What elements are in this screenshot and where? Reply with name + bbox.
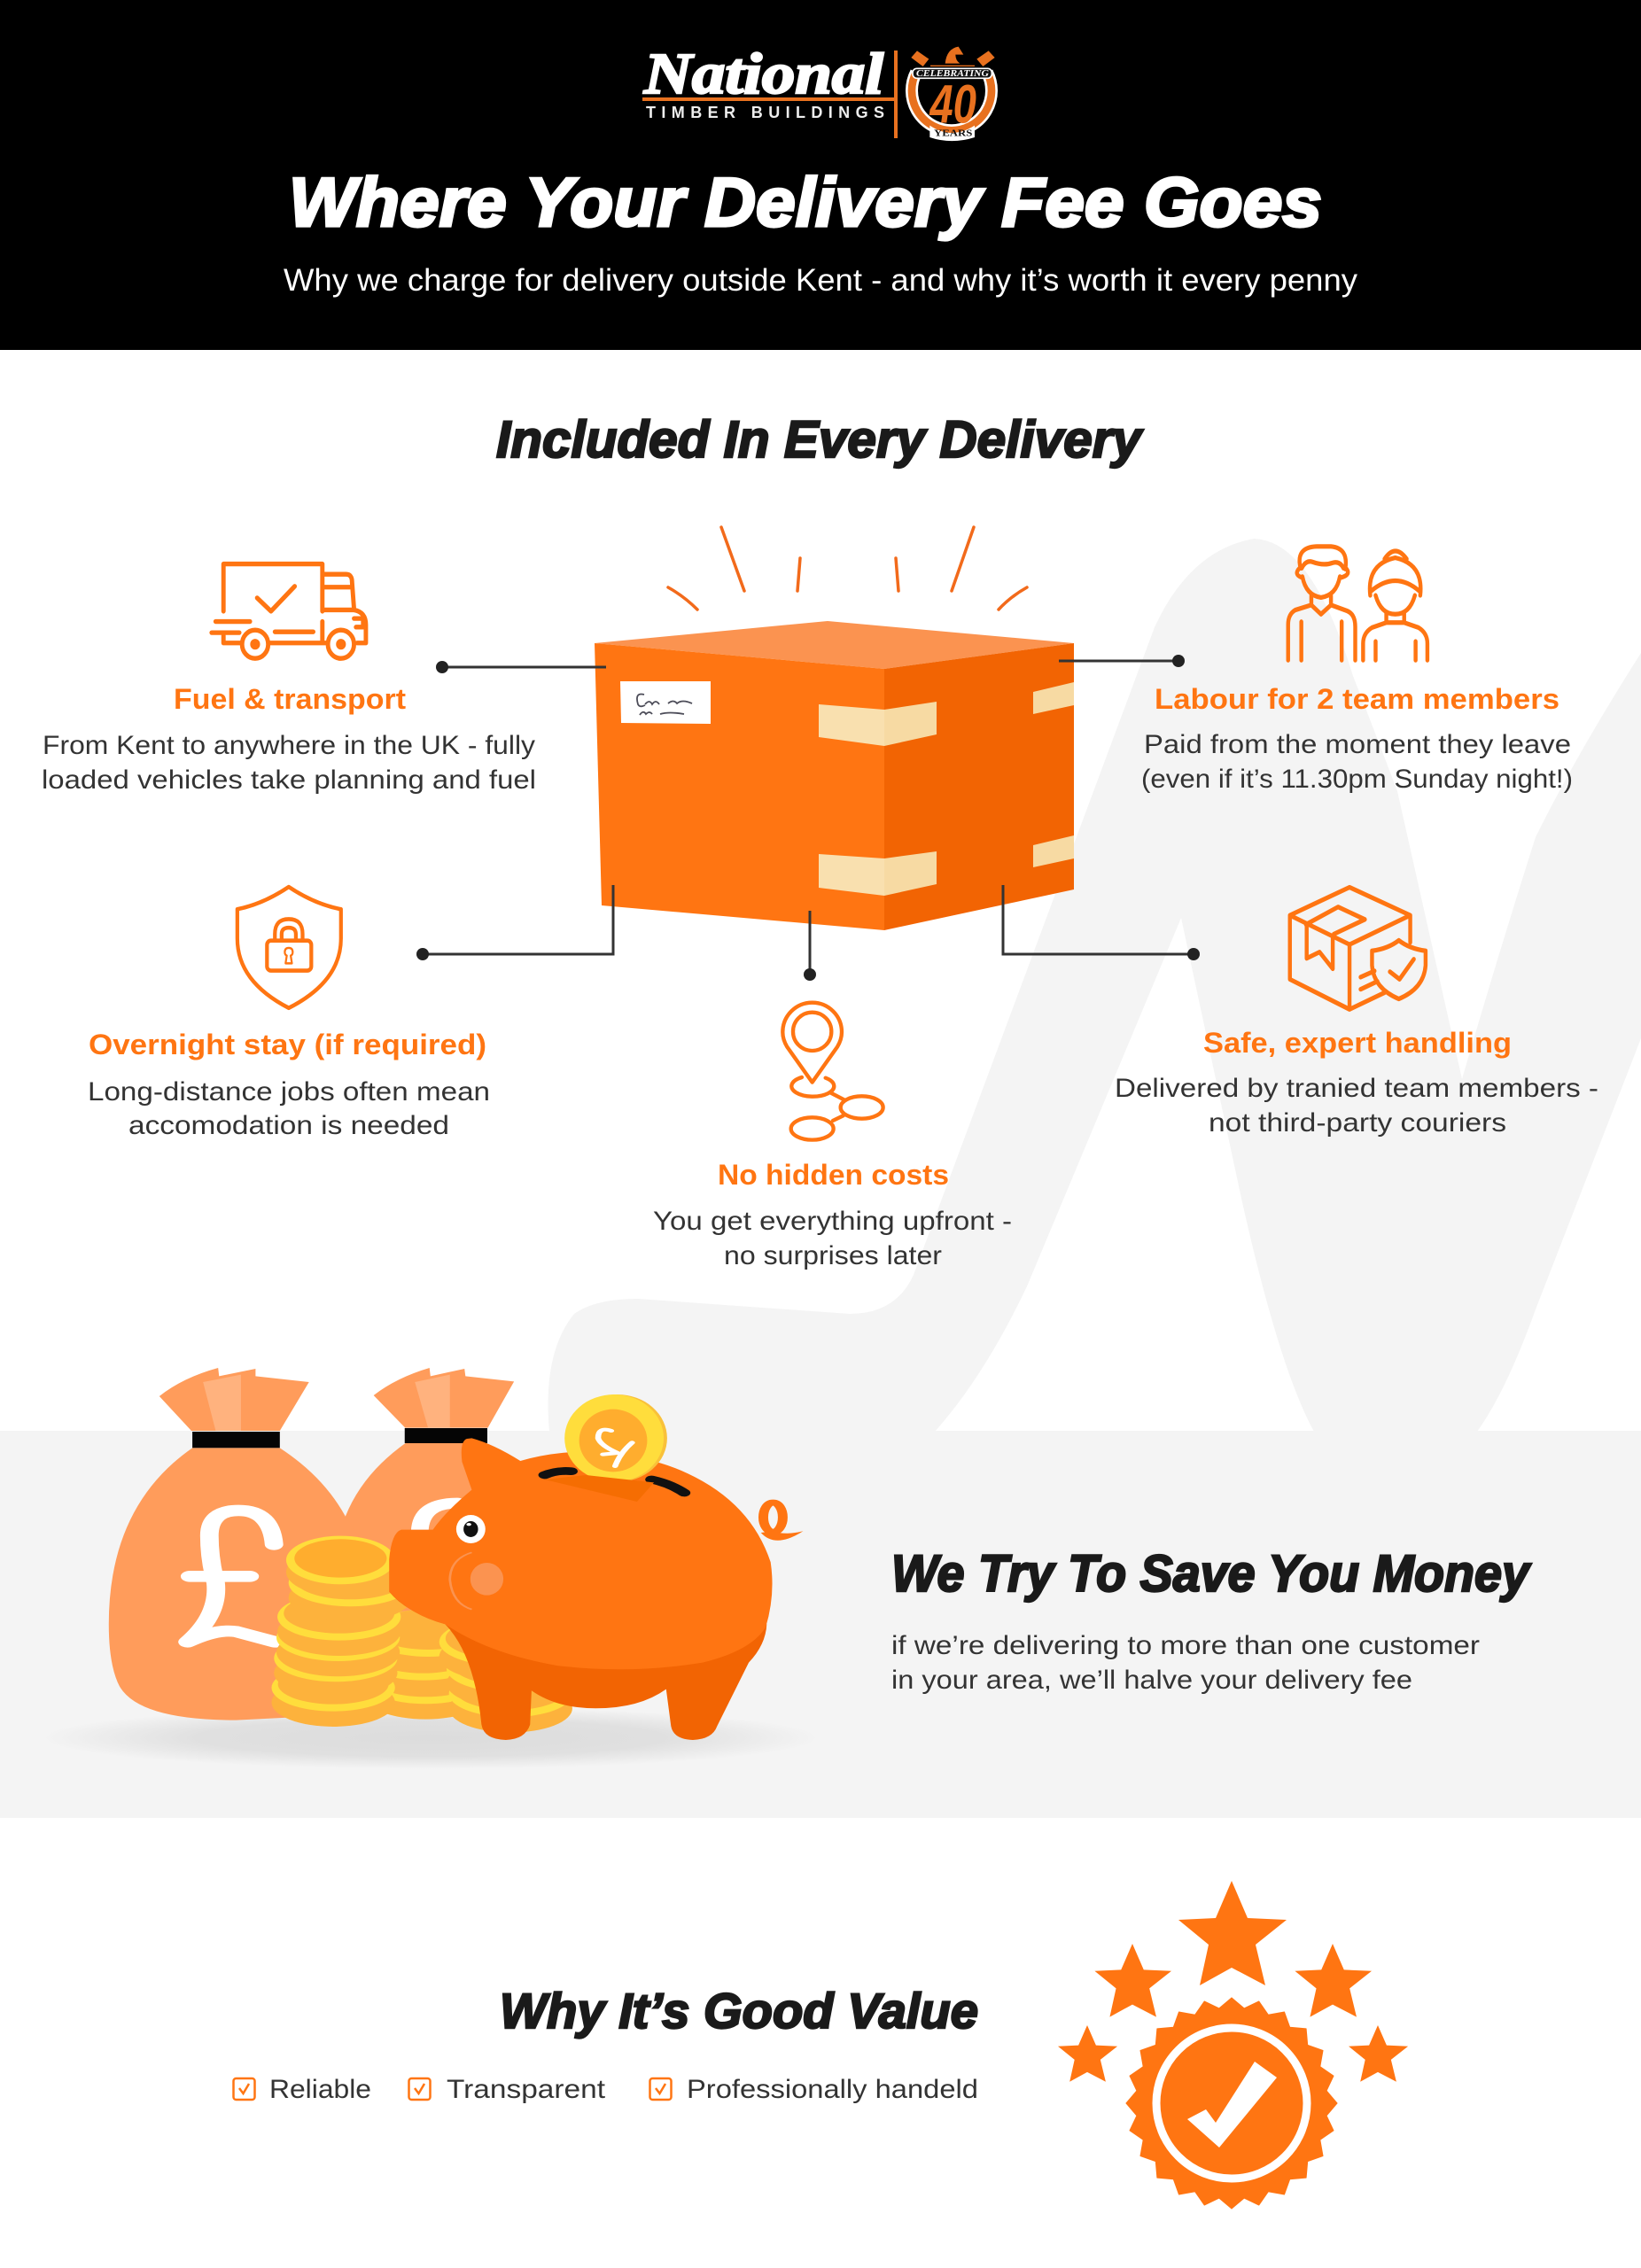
logo: National Timber Buildings: National	[643, 42, 884, 106]
heading: we try to save you money: We Try To Save You Money	[891, 1545, 1532, 1603]
packing tape	[819, 682, 1074, 896]
burst rays	[668, 527, 1027, 610]
subtitle: Why we charge for delivery outside Kent - and why it’s worth it every penny	[284, 263, 1358, 298]
rosette	[1126, 1998, 1337, 2209]
icon: location pin with route	[782, 1003, 883, 1140]
label: Overnight stay (if required)	[89, 1029, 486, 1060]
item: overnight stay	[88, 887, 490, 1140]
description: Delivered by tranied team members -	[1115, 1074, 1598, 1103]
piggy bank	[389, 1394, 803, 1740]
background: large grey N watermark	[548, 539, 1641, 1432]
description	[88, 1077, 490, 1140]
heading: included in every delivery: Included In Every Delivery	[496, 411, 1144, 469]
description: accomodation is needed	[128, 1111, 449, 1140]
logo badge: celebrating 40 years: 40	[929, 74, 976, 135]
money bag front	[109, 1368, 382, 1720]
address label	[620, 681, 711, 724]
money bag back	[314, 1368, 514, 1707]
icon: delivery truck	[212, 564, 366, 658]
check item: reliable	[234, 2075, 371, 2104]
check item: professionally handled: Professionally handeld	[687, 2075, 978, 2104]
label: Labour for 2 team members	[1155, 683, 1559, 715]
item: fuel and transport	[42, 564, 536, 795]
item: safe expert handling	[1115, 887, 1598, 1138]
icon: rosette with check and five stars	[1058, 1881, 1408, 2209]
icon: two team members	[1288, 547, 1427, 660]
check item: transparent: Transparent	[447, 2075, 606, 2104]
label: No hidden costs	[718, 1159, 949, 1191]
description: not third-party couriers	[1209, 1108, 1506, 1138]
savings description	[891, 1631, 1480, 1695]
check item: reliable: Reliable	[269, 2075, 371, 2104]
logo: National Timber Buildings	[642, 42, 898, 138]
logo badge: celebrating 40 years: CELEBRATING	[916, 69, 990, 79]
description: You get everything upfront -	[653, 1207, 1012, 1236]
logo badge: celebrating 40 years	[911, 47, 995, 141]
description	[42, 731, 536, 795]
central parcel illustration	[595, 527, 1074, 930]
connector lines with dots	[416, 655, 1200, 981]
item: no hidden costs	[653, 1003, 1012, 1270]
illustration: money bags, coins and piggy bank	[42, 1368, 820, 1769]
coin stacks	[271, 1536, 572, 1733]
checklist	[234, 2075, 978, 2104]
title: Where Your Delivery Fee Goes	[289, 163, 1322, 241]
logo badge: celebrating 40 years: YEARS	[934, 128, 972, 138]
description: loaded vehicles take planning and fuel	[42, 765, 536, 795]
header band	[0, 0, 1641, 350]
label: Fuel & transport	[174, 683, 406, 715]
icon: shield with padlock	[237, 887, 341, 1008]
description: (even if it’s 11.30pm Sunday night!)	[1141, 765, 1573, 794]
description	[653, 1207, 1012, 1270]
panel: savings band	[0, 1368, 1641, 1818]
item: labour for 2 team members	[1141, 547, 1573, 794]
description: Long-distance jobs often mean	[88, 1077, 490, 1107]
savings description: in your area, we’ll halve your delivery fee	[891, 1666, 1412, 1695]
savings description: if we’re delivering to more than one customer	[891, 1631, 1480, 1660]
description	[1141, 730, 1573, 794]
description: Paid from the moment they leave	[1144, 730, 1571, 759]
description: From Kent to anywhere in the UK - fully	[43, 731, 535, 760]
icon: parcel with shield	[1290, 887, 1426, 1009]
description	[1115, 1074, 1598, 1138]
description: no surprises later	[724, 1241, 942, 1270]
ground shadow	[42, 1707, 820, 1769]
logo: National Timber Buildings: TIMBER BUILDINGS	[646, 104, 884, 121]
heading: why it's good value: Why It’s Good Value	[500, 1983, 978, 2039]
stars	[1058, 1881, 1408, 2082]
box faces	[595, 621, 1074, 930]
label: Safe, expert handling	[1203, 1027, 1512, 1059]
